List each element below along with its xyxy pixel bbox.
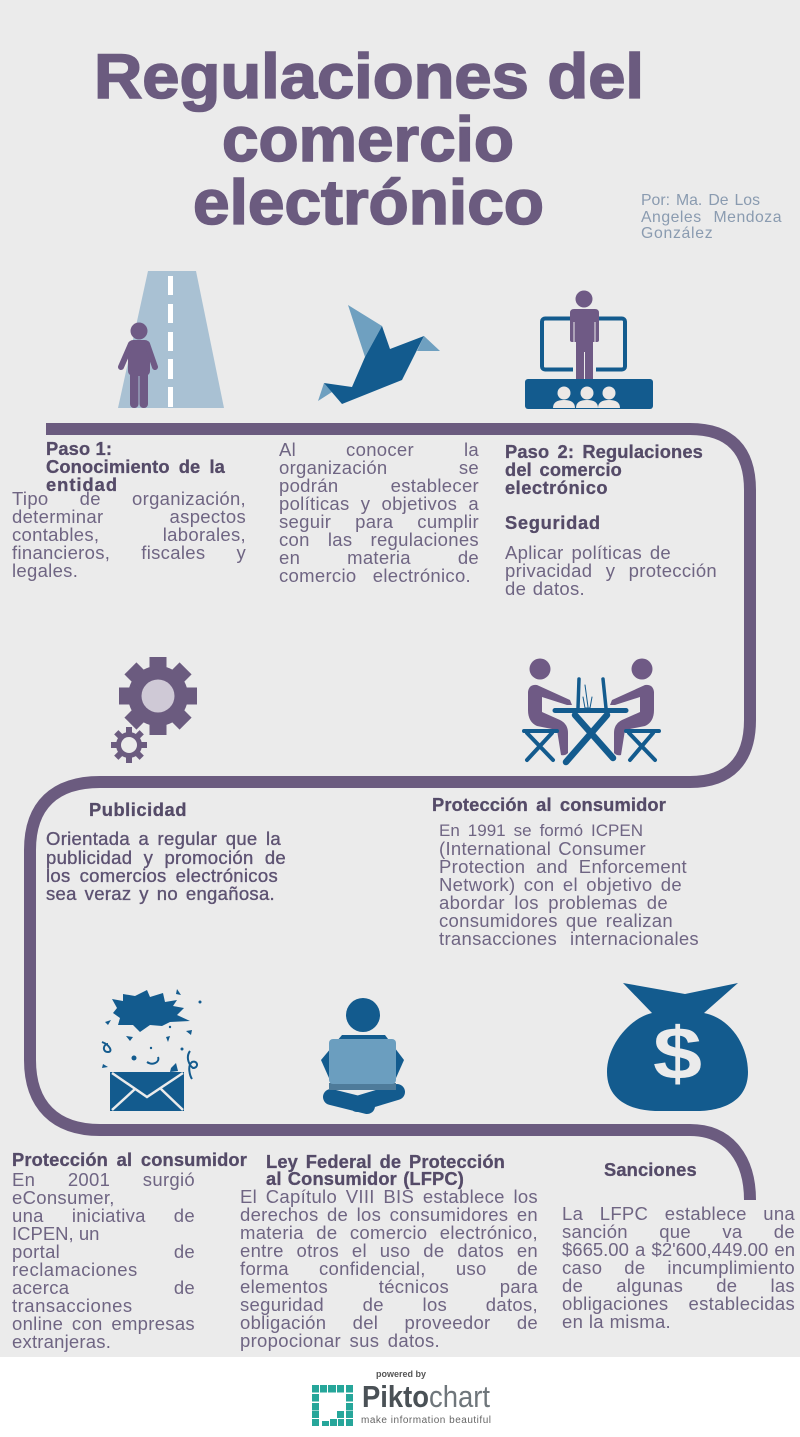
text: eConsumer body: ICPEN, un [12,1223,99,1244]
heading: Paso 1: Paso 1: [46,438,112,459]
heading: Paso 1: Conocimiento de la [46,456,225,477]
icon: envelope with burst [102,989,202,1111]
text: eConsumer body: reclamaciones [12,1259,138,1280]
icon: person with laptop [321,998,404,1106]
author credit: Por: Ma. De Los [641,192,760,209]
title: comercio [222,105,514,175]
heading: Paso 1 [46,438,226,495]
icon: two people at table [524,658,659,762]
text: Ley Federal body: El Capítulo VIII BIS establece los [240,1186,538,1207]
text: Seguridad body [505,542,717,599]
heading: Paso 1: entidad [46,474,118,495]
title: electrónico [193,168,544,238]
text: eConsumer body: eConsumer, [12,1187,115,1208]
heading: Ley Federal [266,1151,505,1190]
heading: Paso 2: Paso 2: Regulaciones [505,441,703,462]
title: Regulaciones del [94,42,644,112]
text: eConsumer body: una iniciativa de [12,1205,195,1226]
text: organización column: con las regulaciones [279,529,479,550]
text: organización column: seguir para cumplir [279,511,479,532]
text: Ley Federal body [240,1186,538,1351]
text: Ley Federal body: forma confidencial, uso de [240,1258,538,1279]
text: Sanciones body: sanción que va de [562,1221,795,1242]
title [94,42,644,238]
text: Publicidad body: sea veraz y no engañosa. [46,882,275,904]
heading: Ley Federal: al Consumidor (LFPC) [266,1168,464,1189]
heading: Publicidad: Publicidad [89,799,187,820]
footer band [0,1357,800,1437]
text: Ley Federal body: derechos de los consumidores en [240,1204,538,1225]
text: organización column: en materia de [279,547,479,568]
text: Seguridad body: privacidad y protección [505,560,717,581]
text: Ley Federal body: materia de comercio electrónico, [240,1222,538,1243]
text: Sanciones body: caso de incumplimiento [562,1257,795,1278]
text: organización column [279,439,479,586]
text: Ley Federal body: seguridad de los datos, [240,1294,538,1315]
text: organización column: políticas y objetivos a [279,493,479,514]
text: ICPEN body: Network) con el objetivo de [439,874,682,895]
text: Ley Federal body: propocionar sus datos. [240,1330,440,1351]
text: eConsumer body: acerca de [12,1277,195,1298]
icon: person on road [118,271,224,408]
text: eConsumer body: online con empresas [12,1313,195,1334]
text: ICPEN body [439,821,699,949]
icon: money bag: $ [653,1012,702,1095]
text: organización column: Al conocer la [279,439,479,460]
text: Paso 1 body: Tipo de organización, [12,488,246,509]
icon: gears [111,657,197,763]
author credit [641,192,782,242]
heading: Ley Federal: Ley Federal de Protección [266,1151,505,1172]
text: Seguridad body: Aplicar políticas de [505,542,671,563]
author credit: Angeles Mendoza [641,208,782,226]
text: Sanciones body: en la misma. [562,1311,671,1332]
text: organización column: comercio electrónico. [279,565,471,586]
Piktochart logo: make information beautiful [361,1415,491,1426]
Piktochart logo: chart [429,1379,490,1414]
text: Paso 1 body: contables, laborales, [12,524,246,545]
text: ICPEN body: (International Consumer [439,838,646,859]
text: organización column: podrán establecer [279,475,479,496]
heading: Paso 2: electrónico [505,477,608,498]
text: Sanciones body: obligaciones establecidas [562,1293,795,1314]
heading: Sanciones: Sanciones [604,1159,697,1180]
author credit: González [641,225,713,242]
text: Publicidad body: los comercios electrónicos [46,864,278,886]
text: ICPEN body: abordar los problemas de [439,892,668,913]
text: Sanciones body: $665.00 a $2'600,449.00 en [562,1239,795,1260]
text: Sanciones body: de algunas de las [562,1275,795,1296]
heading: Paso 2: del comercio [505,459,622,480]
text: Paso 1 body: determinar aspectos [12,506,246,527]
text: Sanciones body: La LFPC establece una [562,1203,795,1224]
text: eConsumer body: portal de [12,1241,195,1262]
text: Ley Federal body: entre otros el uso de datos en [240,1240,538,1261]
text: eConsumer body [12,1169,195,1352]
icon: presenter on stage [525,290,653,409]
Piktochart logo: Pikto [362,1379,429,1414]
text: Ley Federal body: elementos técnicos para [240,1276,538,1297]
heading: Protección al consumidor: Protección al consumidor [432,794,666,815]
Piktochart logo [312,1369,491,1426]
icon: origami bird [318,305,440,404]
text: Ley Federal body: obligación del proveedor de [240,1312,538,1333]
winding timeline path [30,429,750,1200]
heading: Paso 2 [505,441,703,498]
text: eConsumer body: En 2001 surgió [12,1169,195,1190]
text: ICPEN body: transacciones internacionales [439,928,699,949]
text: Paso 1 body: legales. [12,560,78,581]
text: Publicidad body [46,828,286,904]
text: Seguridad body: de datos. [505,578,585,599]
heading: Protección al consumidor 2: Protección al consumidor [12,1149,247,1170]
text: ICPEN body: En 1991 se formó ICPEN [439,821,643,840]
icon: money bag [607,983,748,1111]
text: eConsumer body: extranjeras. [12,1331,111,1352]
Piktochart logo: powered by [376,1369,426,1379]
text: organización column: organización se [279,457,479,478]
text: Paso 1 body: financieros, fiscales y [12,542,246,563]
text: ICPEN body: Protection and Enforcement [439,856,687,877]
text: eConsumer body: transacciones [12,1295,133,1316]
heading: Seguridad: Seguridad [505,512,601,533]
text: Sanciones body [562,1203,795,1332]
text: Publicidad body: publicidad y promoción de [46,846,286,868]
text: Paso 1 body [12,488,246,581]
text: Publicidad body: Orientada a regular que la [46,828,281,849]
text: ICPEN body: consumidores que realizan [439,910,673,931]
